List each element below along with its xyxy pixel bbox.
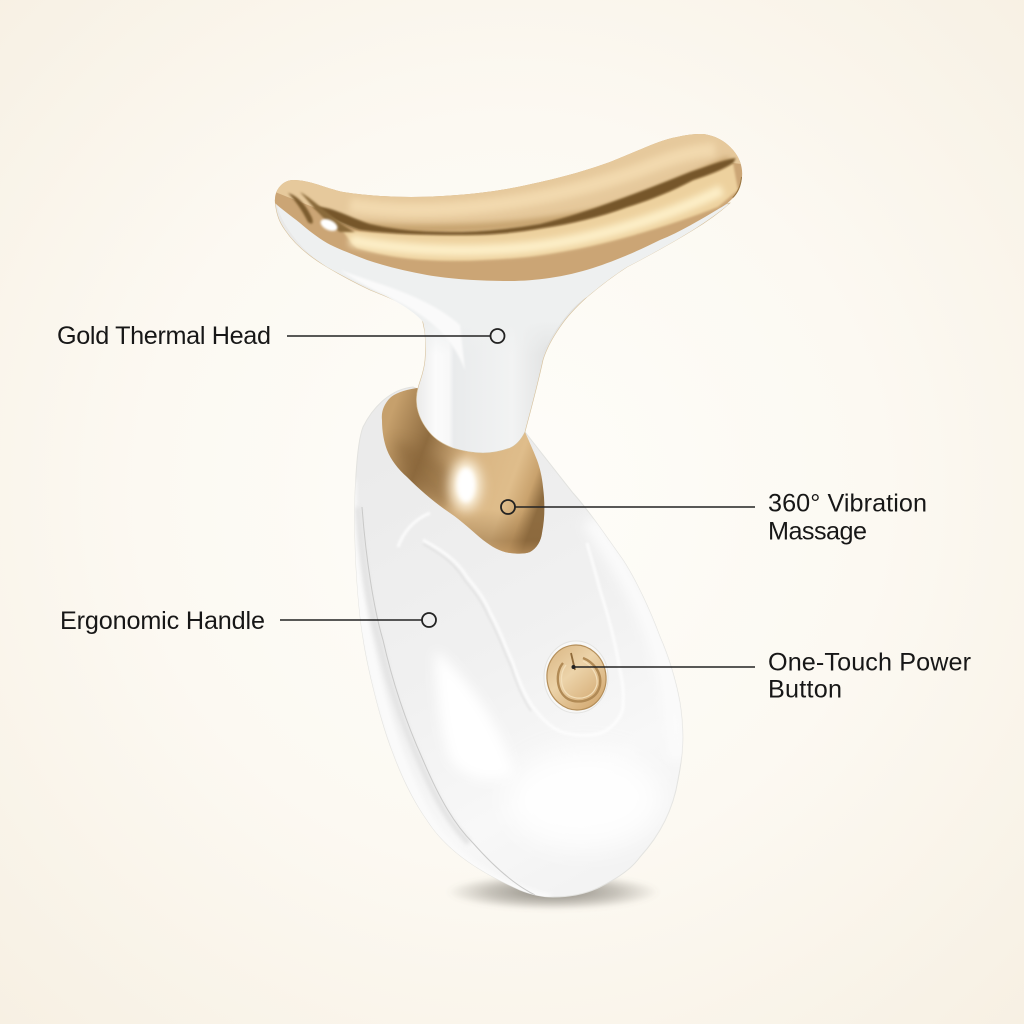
T-head underside shading — [277, 204, 729, 355]
callout: Gold Thermal Head: Gold Thermal Head — [57, 322, 271, 350]
callout: One-Touch Power Button: Button — [768, 676, 842, 704]
T-head left fold highlight — [340, 270, 465, 370]
dark reflection line — [313, 158, 736, 235]
gold thermal head — [275, 134, 742, 281]
callout: One-Touch Power Button — [572, 648, 971, 704]
left rim light — [350, 480, 550, 900]
callout: 360° Vibration Massage: 360° Vibration — [768, 490, 927, 518]
head upper surface — [276, 134, 741, 234]
white T-head stem — [275, 200, 730, 453]
floor shadow — [447, 874, 659, 910]
head base band — [270, 130, 750, 285]
lower-left highlight — [436, 660, 504, 774]
handle shading and contours — [350, 480, 676, 900]
callout: 360° Vibration Massage: Massage — [768, 518, 867, 546]
shade above dark line — [355, 160, 730, 229]
button bezel — [544, 641, 608, 713]
groove — [398, 513, 430, 547]
collar dark left shade — [395, 440, 450, 515]
left tip dark curl — [288, 193, 313, 224]
left tip dark curl 2 — [300, 192, 355, 232]
right edge sheen — [590, 520, 676, 760]
callout: Ergonomic Handle — [60, 607, 436, 635]
left tip sparkle — [319, 218, 339, 232]
head outline tint right — [733, 177, 742, 198]
power button — [543, 641, 610, 714]
callout: One-Touch Power Button: One-Touch Power — [768, 648, 971, 676]
power symbol ring — [558, 658, 600, 701]
power symbol stem — [571, 653, 575, 670]
collar highlight — [451, 460, 481, 510]
upper surface glow — [350, 150, 715, 210]
grey band beside seam — [358, 507, 469, 843]
button face — [543, 641, 610, 714]
callout: Ergonomic Handle: Ergonomic Handle — [60, 607, 265, 635]
product illustration: neck massager — [270, 125, 750, 910]
callout: Gold Thermal Head — [57, 322, 504, 350]
lower body sheen — [573, 790, 644, 832]
inner seam line — [362, 507, 535, 895]
gold collar — [378, 384, 548, 558]
S-curve groove highlight — [424, 540, 610, 674]
bright lower band glow — [350, 190, 722, 250]
bright lower band base — [342, 163, 738, 261]
handle body — [355, 387, 683, 897]
callout: 360° Vibration Massage — [501, 490, 927, 546]
